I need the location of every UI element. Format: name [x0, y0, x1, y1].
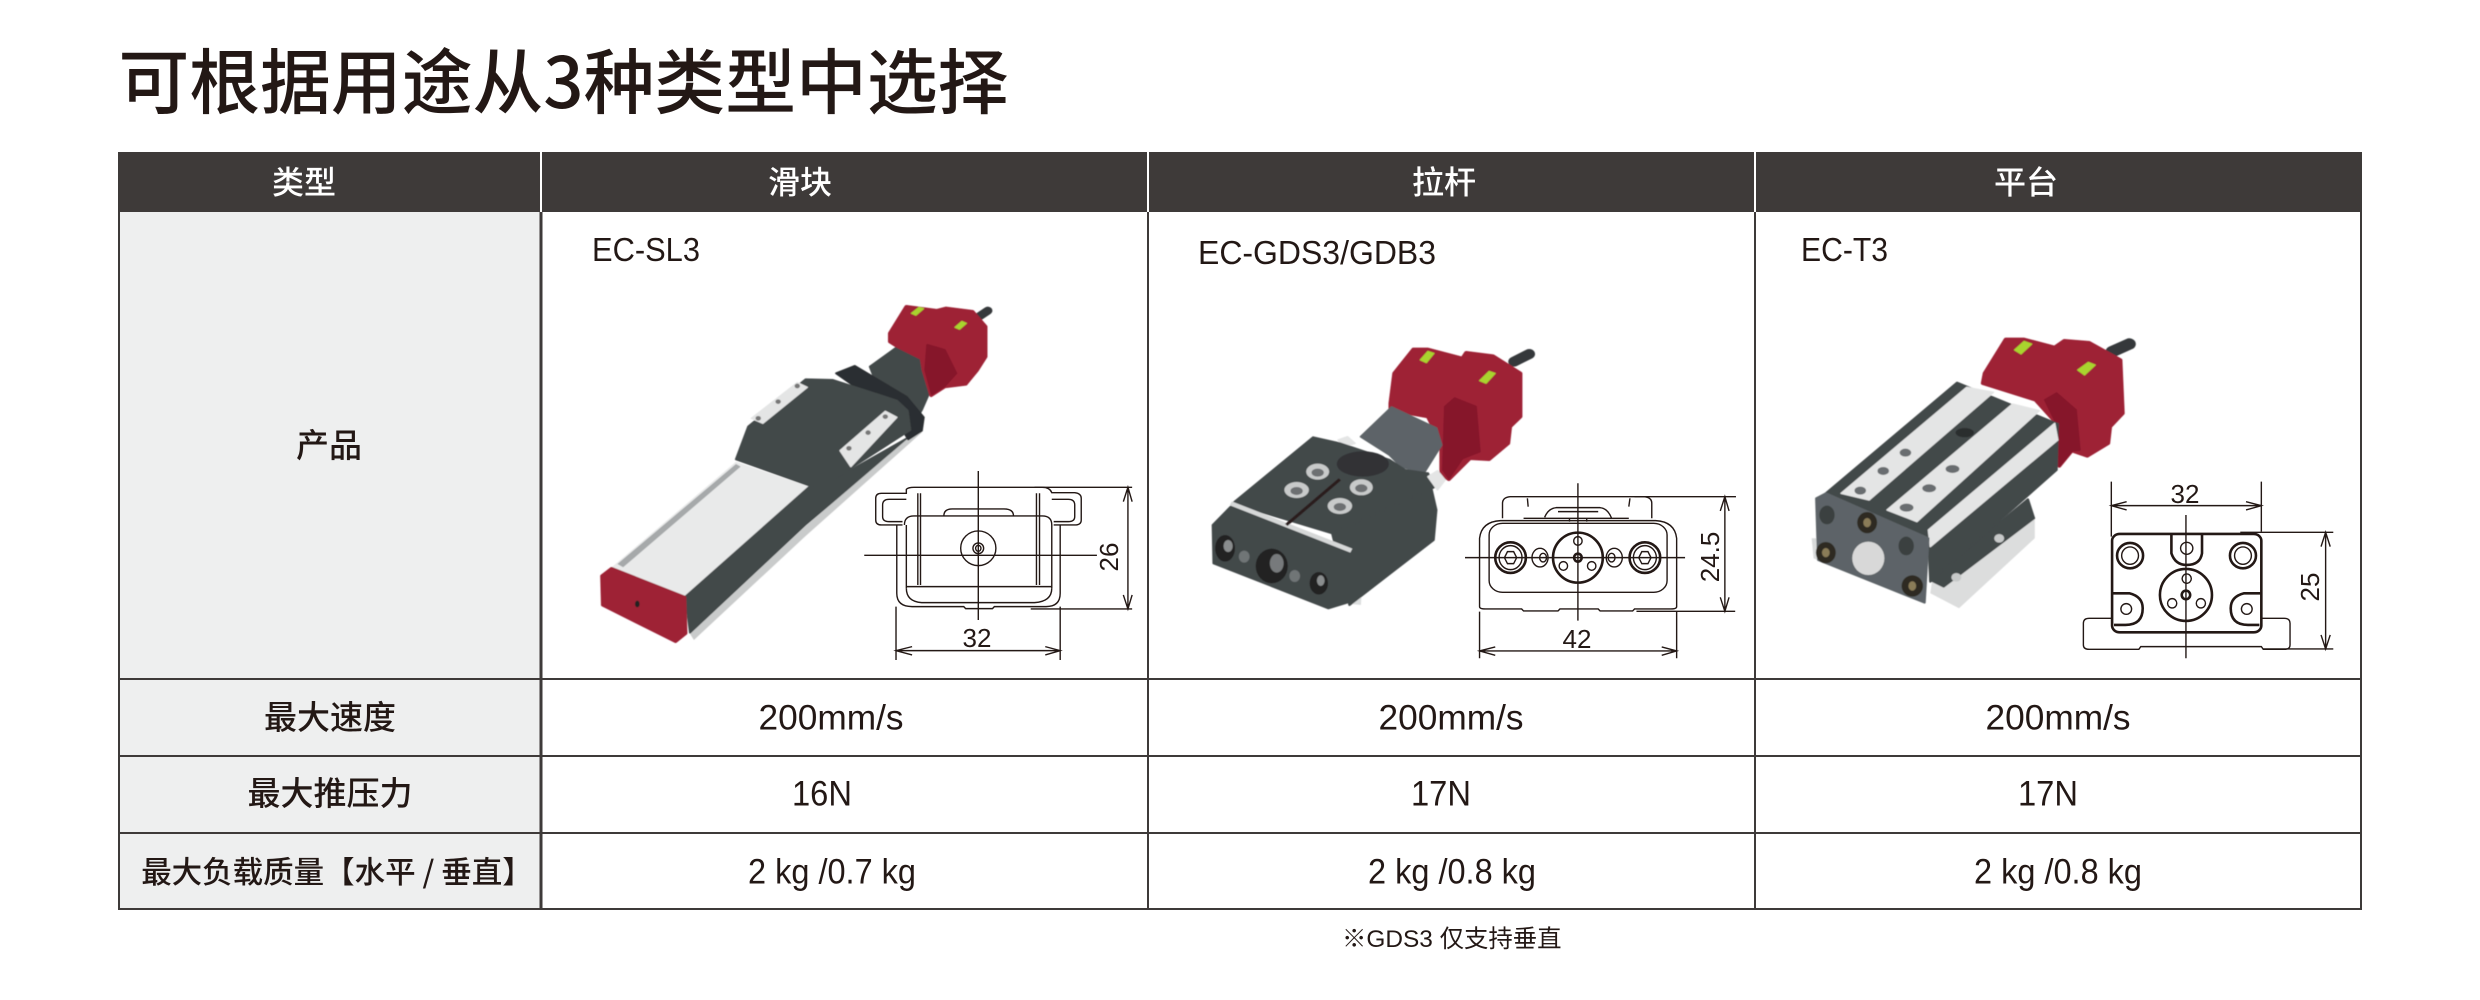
dimension label: 32: 32	[2171, 479, 2199, 509]
thrust: rod: 17N	[1411, 774, 1471, 814]
speed: table: 200mm/s	[1986, 698, 2130, 738]
header: rod: 拉杆	[1412, 158, 1476, 204]
table label column background	[118, 212, 541, 909]
product image: slider actuator	[602, 307, 988, 641]
product image: rod actuator	[1213, 349, 1529, 608]
dimension label: 26: 26	[1094, 543, 1124, 571]
model name: EC-T3: EC-T3	[1801, 232, 1888, 269]
model name: EC-GDS3/GDB3: EC-GDS3/GDB3	[1198, 235, 1436, 272]
thrust: table: 17N	[2018, 774, 2078, 814]
row label: max thrust: 最大推压力	[248, 767, 412, 815]
header: table: 平台	[1994, 158, 2058, 204]
header: slider: 滑块	[768, 158, 832, 204]
speed: slider: 200mm/s	[758, 698, 904, 738]
drawing: slider front view with dimensions	[864, 471, 1132, 660]
payload: table: 2 kg /0.8 kg	[1974, 852, 2142, 892]
footnote: ※GDS3 仅支持垂直	[1342, 926, 1562, 953]
dimension label: 25: 25	[2295, 573, 2325, 601]
payload: slider: 2 kg /0.7 kg	[748, 852, 916, 892]
model name: EC-SL3: EC-SL3	[592, 232, 700, 269]
payload: rod: 2 kg /0.8 kg	[1368, 852, 1536, 892]
table header bar	[118, 152, 2362, 212]
thrust: slider: 16N	[792, 774, 852, 814]
title: 可根据用途从3种类型中选择	[118, 27, 1008, 129]
dimension label: 24.5: 24.5	[1695, 532, 1725, 582]
product image: table actuator	[1812, 339, 2129, 608]
row label: product: 产品	[296, 419, 362, 467]
header: type: 类型	[272, 158, 336, 204]
dimension label: 32: 32	[963, 623, 991, 653]
row label: max speed: 最大速度	[264, 691, 396, 739]
comparison table	[118, 152, 2362, 909]
row label: max payload: 最大负载质量【水平 / 垂直】	[141, 848, 533, 892]
drawing: table front view with dimensions	[2083, 482, 2333, 658]
speed: rod: 200mm/s	[1378, 698, 1524, 738]
dimension label: 42: 42	[1563, 624, 1591, 654]
drawing: rod front view with dimensions	[1465, 483, 1736, 658]
